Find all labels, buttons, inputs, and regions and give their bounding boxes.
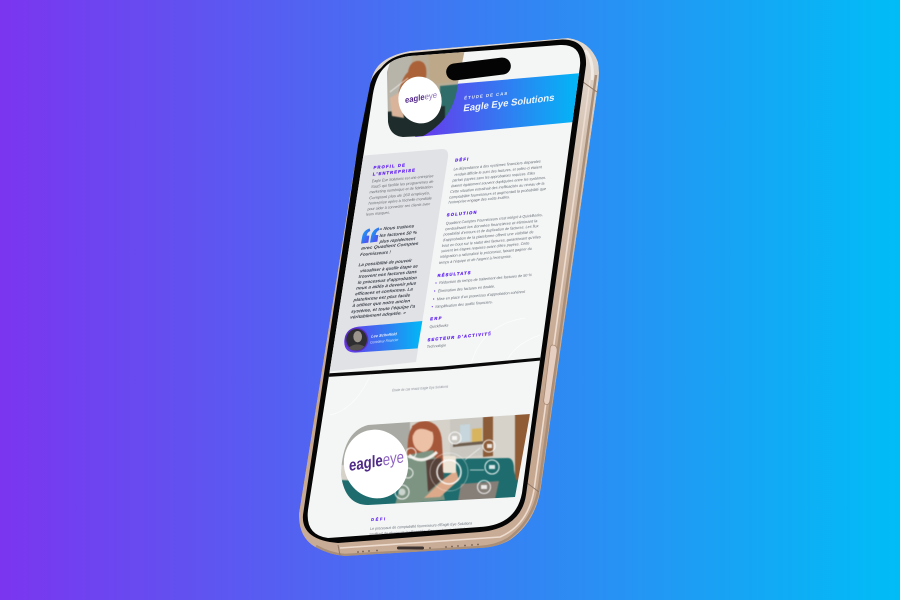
header photo [387, 52, 464, 137]
company profile text: marketing numérique et de fidélisation. [369, 185, 434, 194]
customer quote: visualiser à quelle étape se [360, 263, 419, 273]
challenge section [448, 156, 546, 205]
company profile heading [372, 164, 415, 176]
challenge section: l'entreprise engage des coûts inutiles. [448, 195, 510, 205]
customer quote: à utiliser que notre ancien [352, 298, 411, 308]
case study label: ÉTUDE DE CAS [464, 91, 508, 100]
challenge section: Cette situation entraînait des inefficacités au niveau de la [450, 181, 546, 194]
main photo [341, 414, 530, 505]
solution section: SOLUTION [447, 210, 477, 217]
lower challenge section: DÉFI [371, 516, 385, 522]
results section: RÉSULTATS [437, 270, 471, 278]
company profile heading: PROFIL DE [373, 162, 406, 170]
avatar portrait [345, 328, 368, 352]
customer quote: plateforme est plus facile [352, 292, 411, 302]
results section: Élimination des factures en double. [438, 283, 496, 293]
solution section: centralisant les données financières et éliminant la [445, 219, 539, 231]
company profile text: pour aider à connecter ses clients avec [367, 202, 431, 211]
industry section: SECTEUR D'ACTIVITÉ [427, 331, 492, 342]
solution section: suivent les étapes requises avant d'être payées. Cette [441, 241, 530, 253]
industry section [427, 331, 492, 349]
company profile text: leurs marques. [366, 211, 390, 217]
company profile text [366, 174, 434, 217]
customer quote: efficaces et conformes. La [355, 286, 414, 296]
main logo text: eagleeye [349, 447, 404, 475]
solution section: bout en bout sur le statut des factures, garantissant qu'elles [442, 235, 541, 248]
main logo circle [344, 430, 408, 498]
solution section: possibilité d'erreurs et de duplication de factures. Les flux [443, 224, 539, 237]
phone gold frame [299, 38, 599, 556]
ERP section: QuickBooks [429, 323, 449, 329]
company profile text: l'entreprise opère à l'échelle mondiale [368, 196, 432, 206]
left gray panel [325, 149, 448, 372]
customer quote: le processus d'approbation [358, 275, 418, 285]
customer quote: véritablement adoptée. » [350, 310, 407, 320]
customer quote: La possibilité de pouvoir [358, 258, 413, 267]
customer quote: système, et toute l'équipe l'a [351, 304, 416, 314]
ERP section [430, 316, 448, 328]
lower challenge section [369, 517, 485, 535]
phone [290, 30, 600, 560]
testimonial pill: Contrôleur Financier [370, 338, 399, 345]
challenge section: parfois payées sans les approbations requises. Elles [452, 171, 536, 183]
customer quote: Fournisseurs ! [360, 249, 392, 257]
person name and role: Lee Schofield [371, 332, 398, 339]
right side button [544, 345, 557, 404]
header logo circle [398, 76, 442, 124]
results section: Réduction du temps de traitement des factures de 50 % [439, 273, 533, 285]
black bezel [303, 39, 586, 543]
page divider bar [325, 358, 541, 377]
company title: Eagle Eye Solutions [463, 93, 556, 114]
screen [308, 45, 580, 538]
solution section: Quadient Comptes Fournisseurs s'est intégré à QuickBooks, [446, 213, 543, 226]
icon: quotation marks [361, 227, 379, 244]
solution section: d'approbation de la plateforme offrent une visibilité de [443, 230, 534, 242]
customer quote [350, 223, 420, 320]
challenge section: rendait difficile le suivi des factures, et celles-ci étaient [454, 165, 543, 177]
results section: Simplification des audits financiers. [435, 300, 493, 309]
customer quote: « Nous traitons [379, 223, 415, 231]
customer quote: nous a aidés à devenir plus [356, 281, 417, 291]
challenge section: DÉFI [455, 156, 469, 163]
decorative arcs [488, 332, 491, 336]
results section [432, 270, 533, 309]
customer quote: les factures 50 % [379, 230, 417, 238]
challenge section: étaient également souvent dupliquées entre les systèmes. [451, 176, 546, 188]
customer quote: trouvent nos factures dans [358, 269, 418, 279]
company profile text: Eagle Eye Solutions est une entreprise [372, 174, 434, 183]
customer quote: avec Quadient Comptes [361, 241, 420, 251]
company profile heading: L'ENTREPRISE [373, 167, 416, 177]
solution section: temps à l'équipe et de l'argent à l'entreprise. [439, 254, 512, 265]
solution section: intégration a rationalisé le processus, faisant gagner du [440, 247, 532, 259]
company profile text: SaaS qui facilite les programmes de [371, 180, 434, 189]
antenna seams [338, 82, 597, 555]
company profile text: Comptant plus de 260 employés, [369, 191, 430, 200]
small caption: Étude de cas réussi Eagle Eye Solutions [392, 384, 449, 392]
header titles [464, 92, 554, 112]
testimonial pill [344, 321, 422, 353]
challenge section: La dépendance à des systèmes financiers disparates [453, 159, 541, 171]
header logo text: eagleeye [405, 90, 437, 105]
lower challenge section: souffrait de plusieurs inefficacités. Comme leur logiciel de comptabilité [369, 526, 488, 536]
header band [415, 73, 582, 137]
dynamic island [445, 57, 512, 81]
right column content [427, 156, 546, 349]
industry section: Technologie [427, 343, 446, 349]
solution section [439, 210, 543, 265]
results section: Mise en place d'un processus d'approbation cohérent [437, 290, 526, 301]
left column content [344, 162, 434, 353]
ERP section: ERP [430, 315, 442, 321]
customer quote: plus rapidement [378, 236, 416, 244]
bottom speaker and port [357, 544, 479, 553]
challenge section: comptabilité fournisseurs et augmentait la probabilité que [449, 187, 546, 200]
lower challenge section: Le processus de comptabilité fournisseurs d'Eagle Eye Solutions [370, 521, 472, 531]
